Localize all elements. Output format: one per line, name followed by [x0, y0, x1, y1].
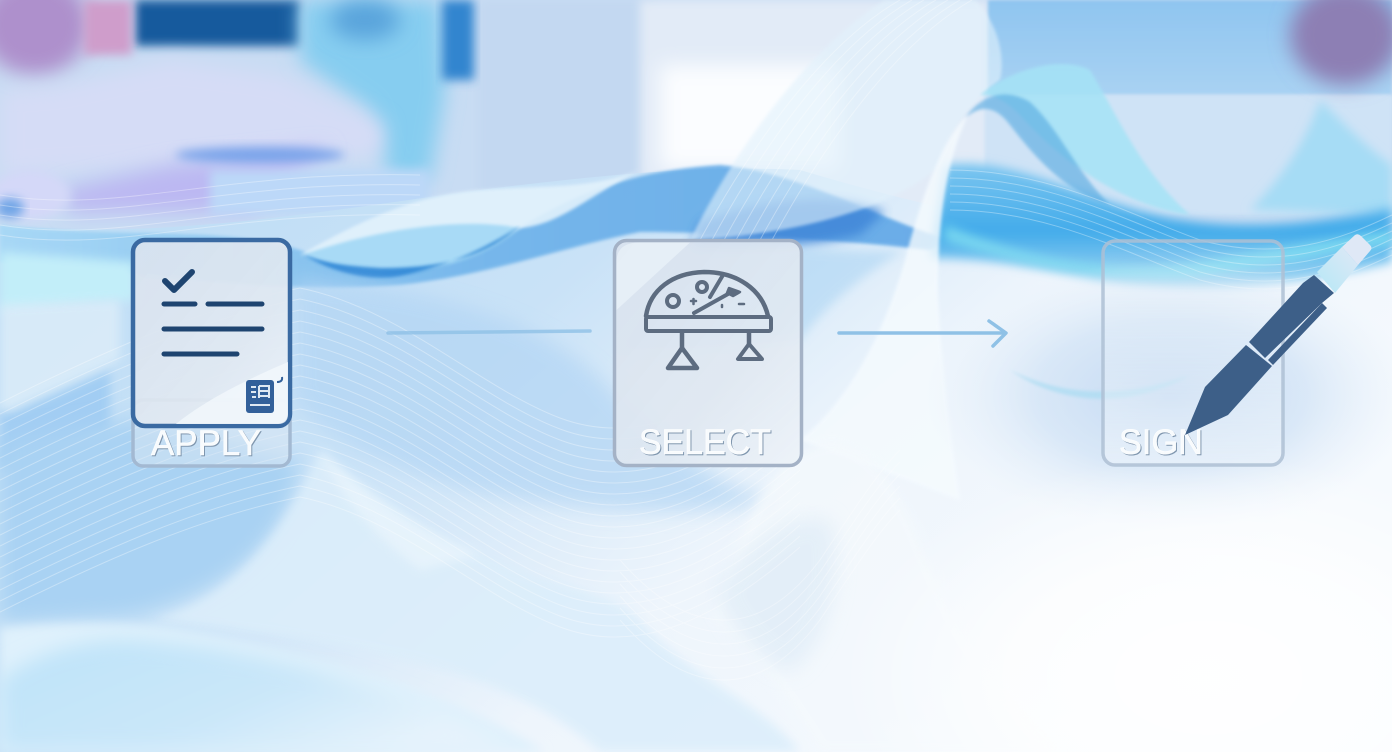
- white peak veil: [150, 450, 800, 752]
- pale cyan left strip: [0, 252, 135, 312]
- lens highlight: [300, 170, 640, 255]
- photo: top left objects: [135, 0, 300, 46]
- sign panel: [1103, 241, 1283, 465]
- select label: SELECT: [639, 423, 771, 462]
- select panel: [614, 240, 802, 466]
- right white lobe: [710, 444, 1060, 752]
- card: select: [614, 240, 802, 466]
- deep blue band centre: [690, 200, 885, 249]
- arrow: apply to select: [388, 331, 590, 333]
- right pale blue haze: [900, 260, 1392, 530]
- mid pale waves: [0, 370, 110, 470]
- sign label: SIGN: [1119, 423, 1203, 462]
- photo: white block and pale wall: [478, 0, 658, 200]
- icon: checklist: [164, 272, 262, 354]
- cyan crest: [980, 64, 1190, 215]
- white falling ribbon: [800, 115, 968, 500]
- translucent top ribbon: [690, 0, 1002, 240]
- icon: small stamp: [246, 377, 282, 413]
- bottom left wave: [0, 624, 545, 752]
- icon: pizza scale: [646, 272, 771, 368]
- apply label tab: APPLY: [151, 424, 261, 463]
- upper wave band: [0, 165, 950, 287]
- photo: top right wall: [988, 0, 1392, 95]
- icon: pen: [1185, 234, 1372, 435]
- arrow: select to sign: [839, 321, 1006, 346]
- bright right band: [930, 164, 1392, 287]
- left lower mass: [0, 420, 300, 622]
- lower body: [0, 169, 1392, 752]
- apply document panel: [133, 240, 290, 426]
- card: apply: [133, 240, 290, 466]
- card: sign: [1103, 234, 1372, 465]
- apply label tab: [133, 400, 290, 466]
